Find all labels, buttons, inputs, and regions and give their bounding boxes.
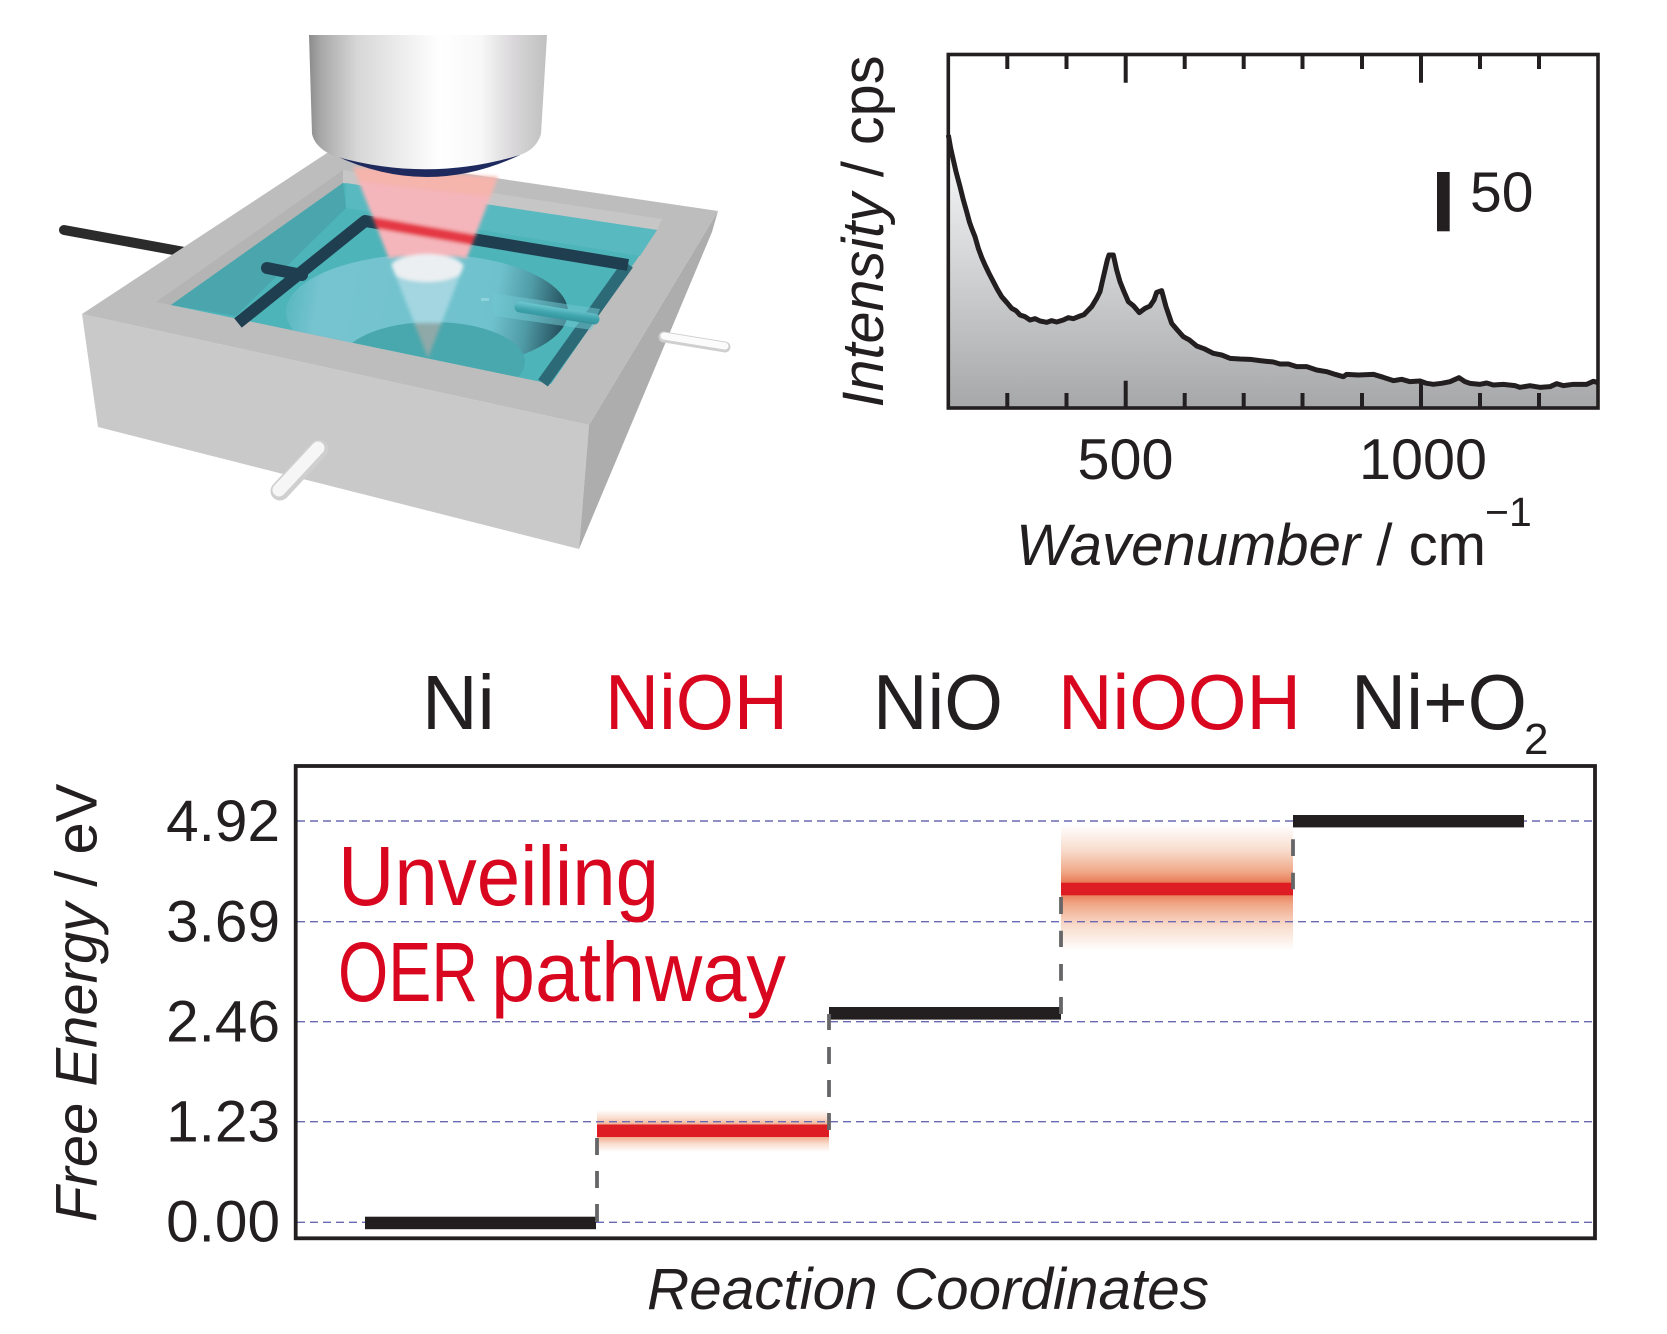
NiOH intermediate glow: [597, 1110, 829, 1152]
callout: Unveiling OER pathway: Unveiling: [338, 829, 659, 923]
energy tick labels: 0.00: [166, 1190, 280, 1255]
schematic: Raman cell under objective: [64, 35, 725, 549]
scale bar: [1437, 172, 1450, 231]
free energy diagram: [45, 658, 1595, 1322]
Raman spectrum chart: [831, 54, 1598, 578]
objective lens: [309, 35, 547, 177]
white electrode lead, front: [279, 448, 319, 491]
x tick label 1000: 1000: [1359, 428, 1487, 492]
x axis title: Reaction Coordinates: [647, 1257, 1209, 1322]
scale bar label: 50: [1470, 161, 1533, 225]
laser beam: [352, 166, 500, 358]
species label NiO: NiO: [873, 658, 1003, 746]
NiOOH level: [1061, 883, 1293, 895]
callout: Unveiling OER pathway: OER: [338, 925, 478, 1019]
x axis title exponent: −1: [1485, 489, 1532, 535]
Ni level: [365, 1217, 596, 1229]
spectrum area and curve: [948, 135, 1598, 408]
callout: Unveiling OER pathway: [338, 829, 786, 1019]
energy tick labels: 3.69: [166, 890, 280, 955]
bottom axis ticks: [1007, 381, 1539, 408]
species label Ni+O2: 2: [1524, 715, 1548, 764]
energy tick labels: [166, 789, 280, 1255]
plot frame: [296, 766, 1595, 1238]
NiOOH intermediate glow: [1061, 825, 1293, 951]
working electrode frame: [238, 221, 628, 383]
species label NiOH: NiOH: [605, 658, 788, 746]
energy tick labels: 1.23: [166, 1090, 280, 1155]
NiO level: [829, 1007, 1061, 1020]
energy tick labels: 4.92: [166, 789, 280, 854]
species label Ni: Ni: [422, 660, 495, 746]
electrolyte: [171, 183, 657, 384]
black electrode lead: [64, 230, 190, 253]
callout: Unveiling OER pathway: pathway: [491, 925, 786, 1019]
species label Ni+O2: Ni+O: [1351, 658, 1527, 746]
counter electrode rod: [481, 293, 600, 330]
step connectors: [597, 839, 1293, 1222]
species label NiOOH: NiOOH: [1058, 658, 1301, 746]
NiOH level: [597, 1124, 829, 1137]
plot frame: [948, 54, 1598, 408]
recess in the cell floor: [286, 256, 568, 378]
white reference electrode lead, right: [664, 336, 725, 347]
x axis title: Wavenumber / cm: [1016, 513, 1486, 578]
top axis ticks: [1007, 55, 1539, 83]
x tick label 500: 500: [1078, 428, 1173, 492]
energy tick labels: 2.46: [166, 990, 280, 1055]
y axis title: Intensity / cps: [831, 56, 896, 408]
Ni+O2 level: [1293, 815, 1524, 827]
cell body: [82, 153, 718, 549]
y axis title: Free Energy / eV: [45, 783, 110, 1222]
